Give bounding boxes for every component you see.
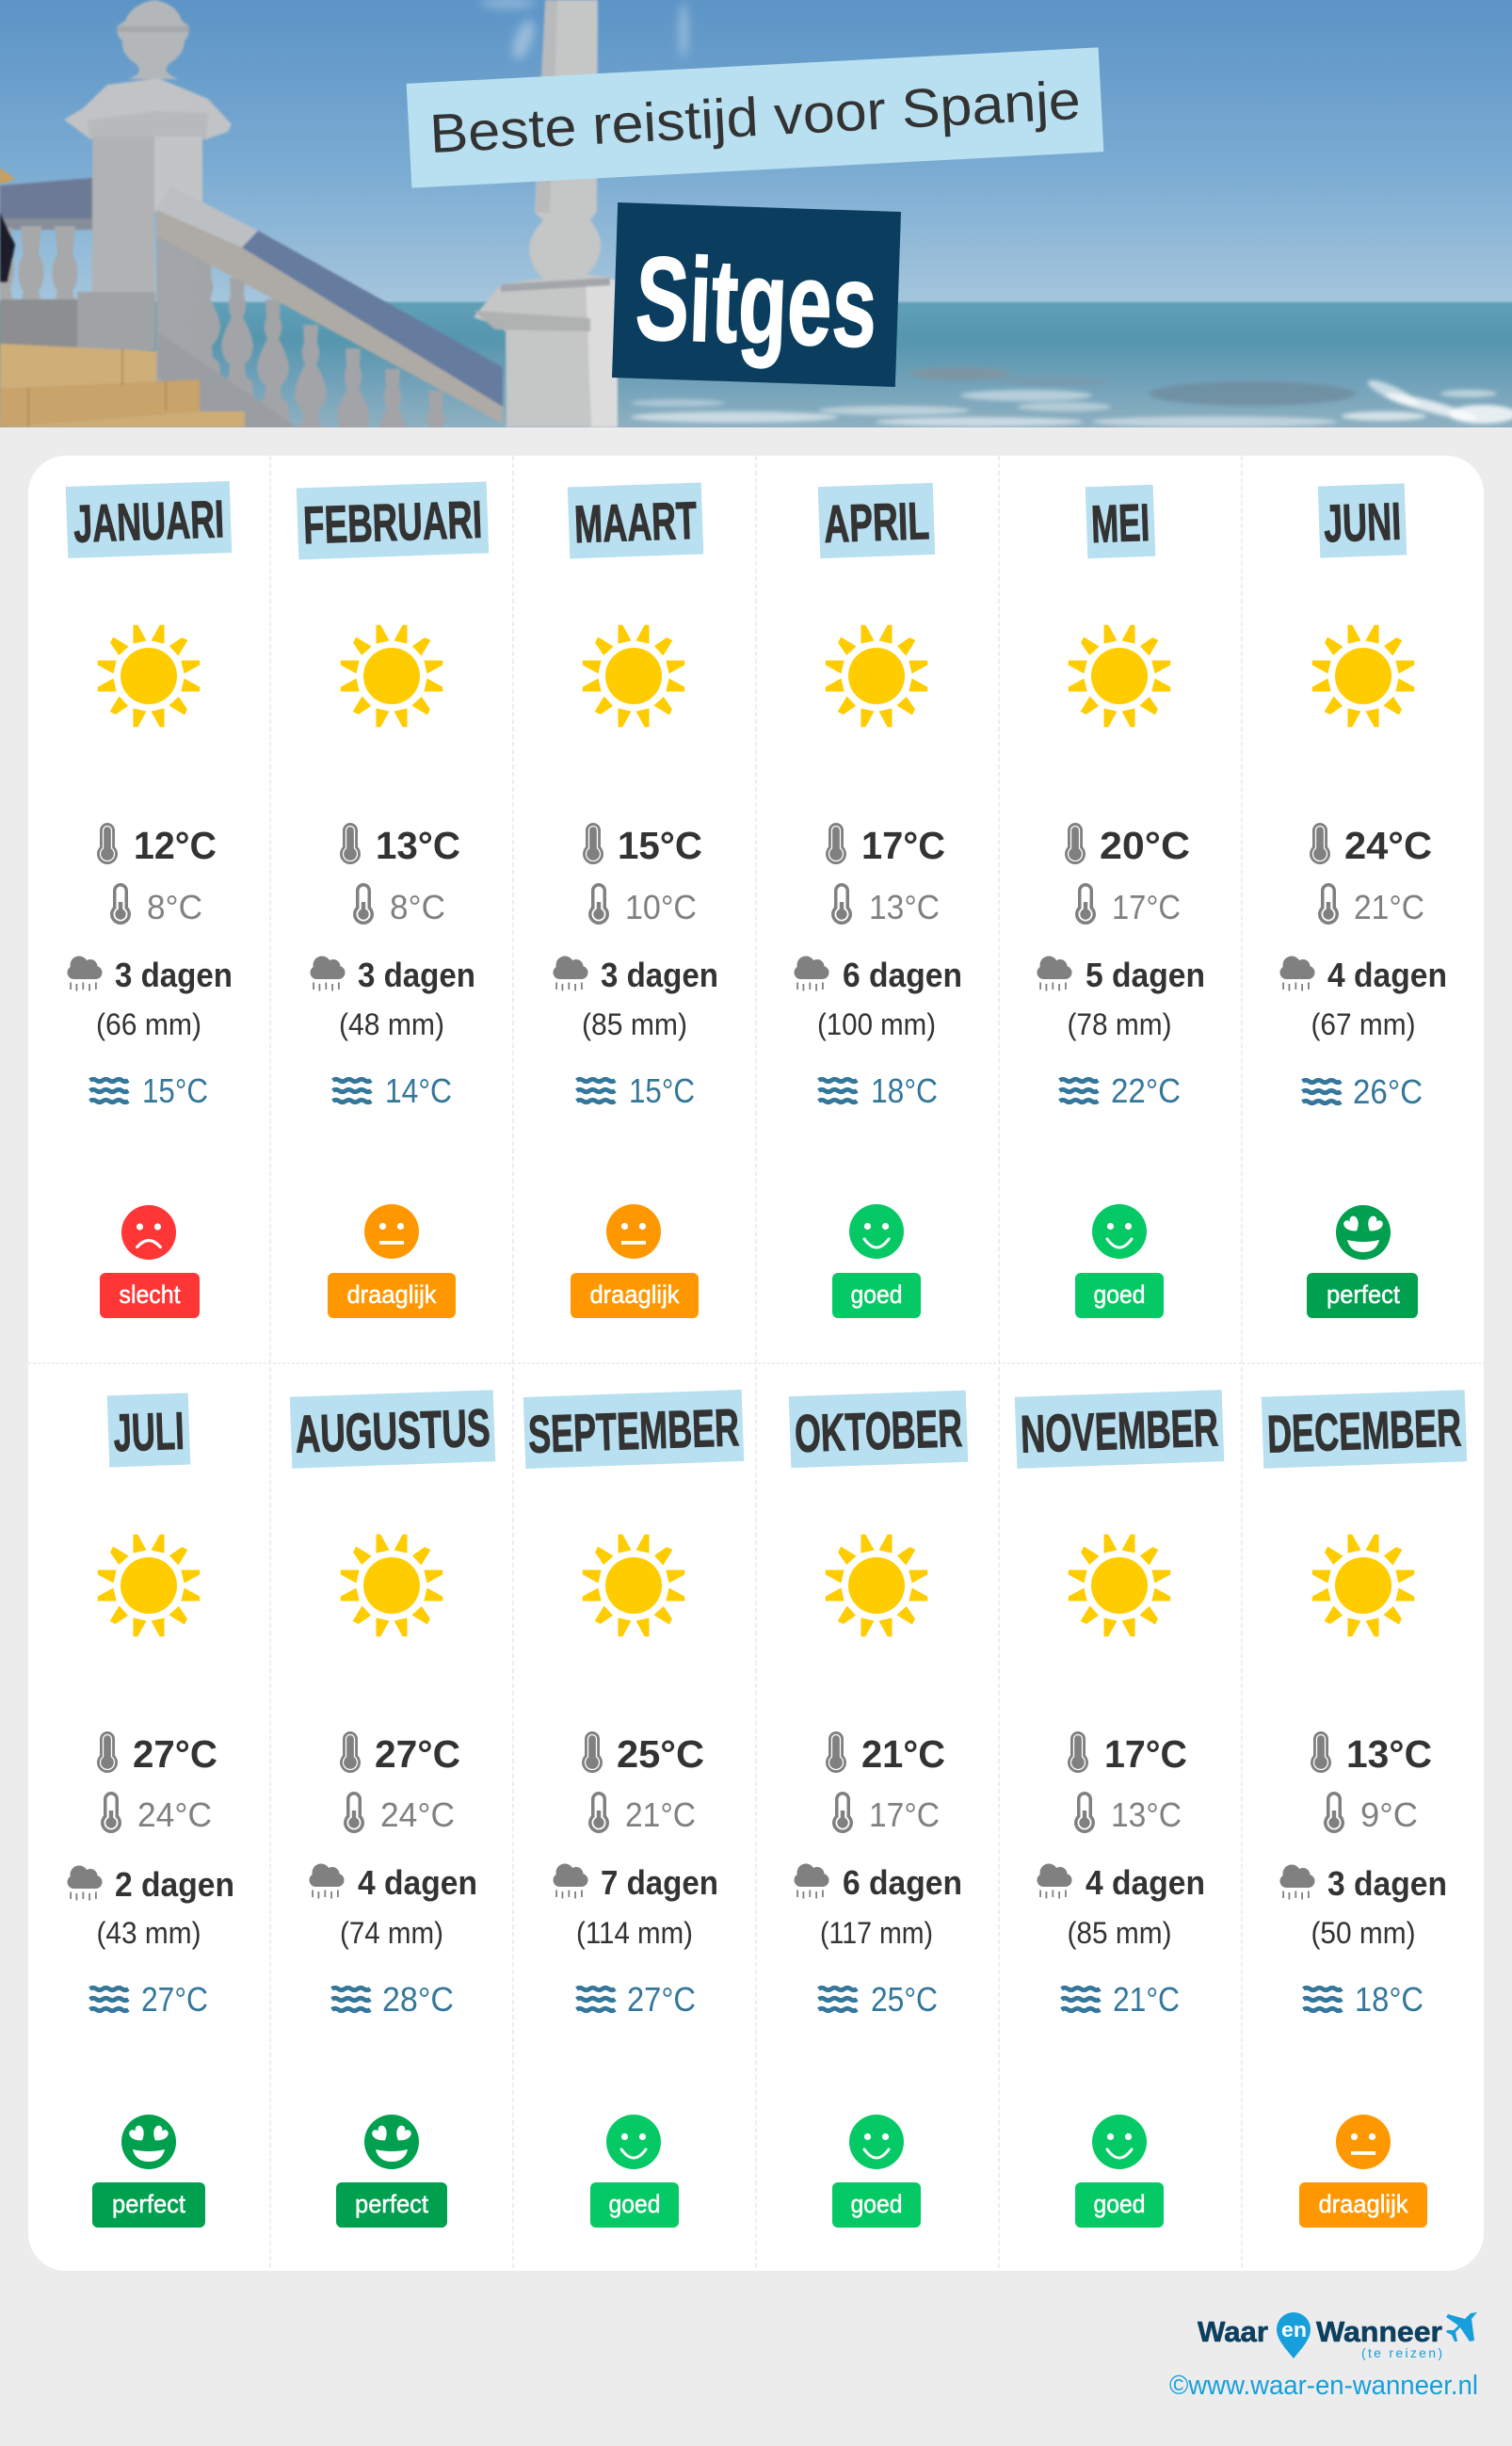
rating tag	[832, 1273, 921, 1318]
rain days: 5 dagen	[1086, 956, 1205, 994]
month label	[789, 1391, 968, 1468]
rain days	[311, 956, 475, 994]
icon: map pin: en	[1281, 2318, 1307, 2341]
month label: SEPTEMBER	[527, 1397, 740, 1464]
min temperature: 21°C	[1354, 888, 1424, 926]
sea temperature	[576, 1980, 696, 2019]
min temperature: 8°C	[147, 888, 202, 926]
rating tag: goed	[851, 1280, 902, 1309]
panel: september	[523, 1390, 744, 2228]
max temperature	[97, 1731, 217, 1776]
sea temperature	[1303, 1980, 1424, 2019]
panel: januari	[66, 481, 233, 1318]
rain days: 2 dagen	[115, 1865, 234, 1904]
min temperature	[353, 883, 445, 926]
icon: sun	[1312, 625, 1414, 727]
month label: JULI	[112, 1401, 185, 1462]
sea temperature	[819, 1071, 938, 1110]
min temperature: 24°C	[137, 1795, 212, 1834]
icon: rating face	[849, 2115, 904, 2169]
icon: sun	[98, 625, 200, 727]
rain days	[1280, 956, 1447, 994]
max temperature	[826, 1731, 945, 1776]
min temperature: 13°C	[1111, 1795, 1182, 1834]
rating tag	[336, 2182, 447, 2228]
rain days	[554, 1863, 718, 1902]
logo word: Wanneer: Wanneer	[1316, 2315, 1442, 2348]
sea waves and foam	[631, 367, 1512, 427]
month label	[1015, 1390, 1224, 1469]
logo: Waar en Wanneer	[1198, 2312, 1477, 2360]
rating tag: perfect	[1327, 1280, 1400, 1309]
icon: sun	[826, 625, 927, 727]
month label	[568, 483, 703, 558]
rain days: 6 dagen	[843, 956, 962, 994]
sea temperature: 14°C	[385, 1071, 452, 1110]
icon: rating face	[1092, 1204, 1147, 1259]
rainfall: (43 mm)	[96, 1916, 201, 1950]
min temperature	[588, 1792, 696, 1834]
logo word: Waar: Waar	[1198, 2315, 1268, 2348]
max temperature	[583, 823, 702, 867]
sea temperature	[333, 1071, 452, 1110]
month label: FEBRUARI	[302, 490, 483, 555]
rain days	[554, 956, 718, 994]
month label	[818, 483, 935, 558]
month label: AUGUSTUS	[295, 1397, 491, 1464]
rain days: 3 dagen	[1327, 1864, 1447, 1903]
icon: sun	[583, 1535, 684, 1636]
rainfall: (114 mm)	[576, 1916, 693, 1950]
max temperature	[1310, 823, 1432, 867]
sea temperature	[331, 1980, 454, 2019]
max temperature: 24°C	[1344, 824, 1432, 867]
city name panel	[612, 202, 901, 387]
rainfall: (74 mm)	[340, 1916, 443, 1950]
panel: februari	[297, 481, 489, 1318]
sea temperature	[576, 1071, 695, 1110]
panel: november	[1015, 1390, 1224, 2228]
rainfall: (78 mm)	[1068, 1007, 1171, 1041]
icon: rating face	[121, 1205, 176, 1260]
max temperature: 20°C	[1100, 824, 1190, 867]
rating tag	[100, 1273, 200, 1318]
max temperature	[340, 1731, 460, 1776]
month label: JUNI	[1323, 491, 1402, 553]
icon: rating face	[606, 1204, 661, 1259]
sea temperature: 22°C	[1111, 1071, 1181, 1110]
rain days: 4 dagen	[1327, 956, 1447, 994]
month label: OKTOBER	[794, 1398, 963, 1463]
max temperature	[1065, 823, 1190, 867]
max temperature	[1311, 1731, 1432, 1776]
icon: sun	[341, 625, 442, 727]
panel: december	[1262, 1390, 1467, 2228]
rainfall: (67 mm)	[1311, 1007, 1416, 1041]
sea temperature: 27°C	[141, 1980, 208, 2019]
panel: juli	[68, 1393, 234, 2228]
min temperature	[344, 1792, 455, 1834]
min temperature	[110, 883, 202, 926]
rating tag: perfect	[355, 2190, 428, 2218]
min temperature	[1074, 1792, 1182, 1834]
icon: airplane	[1446, 2312, 1477, 2341]
title banner	[407, 47, 1103, 188]
rain days: 7 dagen	[601, 1863, 718, 1902]
min temperature: 9°C	[1360, 1795, 1418, 1834]
sea temperature: 26°C	[1353, 1072, 1423, 1111]
sea temperature	[90, 1071, 208, 1110]
rating tag	[1075, 1273, 1164, 1318]
month label	[107, 1393, 190, 1467]
min temperature: 17°C	[869, 1795, 940, 1834]
rain days: 3 dagen	[358, 956, 475, 994]
rain days: 3 dagen	[115, 956, 233, 994]
rain days	[309, 1863, 477, 1902]
icon: rating face	[1092, 2115, 1147, 2169]
min temperature: 13°C	[869, 888, 940, 926]
rainfall: (100 mm)	[817, 1007, 936, 1041]
rating tag	[328, 1273, 456, 1318]
panel: april	[795, 483, 962, 1318]
panel: maart	[554, 483, 718, 1318]
min temperature: 10°C	[625, 888, 697, 926]
rating tag	[832, 2182, 921, 2228]
max temperature	[826, 823, 945, 867]
rain days	[68, 1865, 234, 1904]
rain days	[68, 956, 233, 994]
max temperature: 27°C	[133, 1732, 217, 1776]
panel: mei	[1037, 485, 1205, 1318]
rating tag: goed	[608, 2190, 661, 2218]
panel: juni	[1280, 483, 1447, 1318]
icon: rating face	[121, 2115, 176, 2169]
max temperature	[97, 823, 217, 867]
rain days	[795, 1863, 962, 1902]
max temperature: 27°C	[375, 1732, 460, 1776]
rain days	[795, 956, 962, 994]
rain days: 4 dagen	[1086, 1863, 1205, 1902]
rating tag: draaglijk	[589, 1280, 680, 1309]
title text: Beste reistijd voor Spanje	[428, 70, 1082, 165]
sea temperature: 18°C	[871, 1071, 938, 1110]
rain days	[1037, 1863, 1205, 1902]
max temperature: 21°C	[861, 1732, 945, 1776]
sea temperature	[819, 1980, 938, 2019]
sea temperature	[1062, 1980, 1180, 2019]
rain days: 4 dagen	[358, 1863, 477, 1902]
city name: Sitges	[634, 232, 879, 372]
rating tag	[1307, 1273, 1418, 1318]
panel: augustus	[290, 1390, 495, 2228]
rating tag	[1299, 2182, 1427, 2228]
rainfall: (48 mm)	[339, 1007, 444, 1041]
sea temperature: 28°C	[382, 1980, 454, 2019]
rainfall: (85 mm)	[1068, 1916, 1171, 1950]
rain days: 6 dagen	[843, 1863, 962, 1902]
sea temperature: 18°C	[1355, 1980, 1424, 2019]
icon: rating face	[849, 1204, 904, 1259]
icon: sun	[1312, 1535, 1414, 1636]
month label: MAART	[573, 491, 698, 554]
sea temperature	[1060, 1071, 1181, 1110]
max temperature: 13°C	[1346, 1732, 1432, 1776]
rating tag: goed	[1094, 1280, 1145, 1309]
min temperature	[588, 883, 697, 926]
rating tag	[590, 2182, 679, 2228]
rating tag	[1075, 2182, 1164, 2228]
min temperature	[101, 1792, 212, 1834]
min temperature	[831, 883, 940, 926]
sea temperature: 15°C	[629, 1071, 695, 1110]
sea temperature	[90, 1980, 208, 2019]
rating tag: goed	[1094, 2190, 1145, 2218]
icon: sun	[98, 1535, 200, 1636]
min temperature	[1318, 883, 1424, 926]
rating tag: draaglijk	[1318, 2190, 1408, 2218]
website url: ©www.waar-en-wanneer.nl	[1169, 2371, 1478, 2401]
rainfall: (66 mm)	[96, 1007, 201, 1041]
month label	[290, 1390, 495, 1469]
sea temperature: 21°C	[1113, 1980, 1180, 2019]
max temperature: 17°C	[1104, 1732, 1187, 1776]
min temperature	[832, 1792, 940, 1834]
month label	[1086, 485, 1155, 558]
min temperature	[1324, 1792, 1418, 1834]
min temperature: 24°C	[380, 1795, 455, 1834]
header photo: Sitges seafront with balustrade	[0, 0, 1512, 427]
rating tag: draaglijk	[346, 1280, 437, 1309]
max temperature: 15°C	[618, 824, 702, 867]
rating tag: goed	[851, 2190, 902, 2218]
icon: rating face	[1336, 2115, 1391, 2169]
icon: map pin	[1277, 2312, 1311, 2358]
month label: NOVEMBER	[1020, 1397, 1219, 1464]
max temperature: 17°C	[861, 824, 945, 867]
month label	[1318, 483, 1407, 558]
max temperature	[340, 823, 460, 867]
logo tagline: (te reizen)	[1361, 2345, 1442, 2360]
month label: JANUARI	[72, 489, 225, 554]
rainfall: (50 mm)	[1311, 1916, 1416, 1950]
max temperature: 25°C	[617, 1732, 704, 1776]
icon: sun	[341, 1535, 442, 1636]
icon: sun	[1069, 625, 1170, 727]
rainfall: (117 mm)	[820, 1916, 933, 1950]
min temperature	[1075, 883, 1181, 926]
icon: sun	[583, 625, 684, 727]
min temperature: 17°C	[1112, 888, 1181, 926]
icon: rating face	[606, 2115, 661, 2169]
month label	[66, 481, 232, 558]
month label: APRIL	[823, 491, 930, 554]
icon: rating face	[364, 1204, 419, 1259]
panel: oktober	[789, 1391, 968, 2228]
min temperature: 8°C	[390, 888, 445, 926]
rating tag	[571, 1273, 699, 1318]
sea temperature	[1303, 1072, 1423, 1111]
sea temperature: 25°C	[871, 1980, 938, 2019]
icon: sun	[826, 1535, 927, 1636]
rating tag: perfect	[112, 2190, 185, 2218]
month label: MEI	[1090, 492, 1150, 554]
month label	[297, 481, 489, 560]
icon: rating face	[1336, 1205, 1391, 1260]
rating tag: slecht	[119, 1280, 181, 1309]
sea temperature: 27°C	[627, 1980, 696, 2019]
rain days: 3 dagen	[601, 956, 718, 994]
icon: rating face	[364, 2115, 419, 2169]
panel: calendar card	[28, 456, 1484, 2271]
max temperature	[582, 1731, 704, 1776]
max temperature	[1068, 1731, 1187, 1776]
max temperature: 13°C	[376, 824, 460, 867]
icon: sun	[1069, 1535, 1170, 1636]
rainfall: (85 mm)	[582, 1007, 687, 1041]
rating tag	[92, 2182, 205, 2228]
month label	[523, 1390, 744, 1469]
max temperature: 12°C	[134, 824, 217, 867]
sea temperature: 15°C	[142, 1071, 208, 1110]
rain days	[1037, 956, 1205, 994]
rain days	[1280, 1864, 1447, 1903]
min temperature: 21°C	[625, 1795, 696, 1834]
